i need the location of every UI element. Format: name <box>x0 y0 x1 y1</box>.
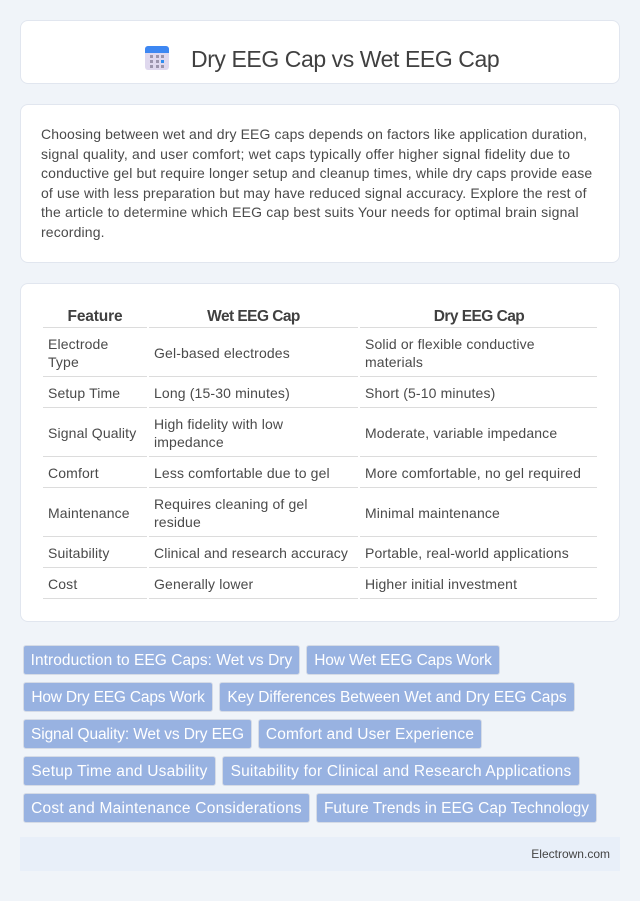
row: electrode type: materials <box>365 354 423 370</box>
row: comfort: Comfort <box>48 465 99 481</box>
table header <box>68 308 524 325</box>
table header: Feature <box>68 308 122 325</box>
row: signal quality <box>48 416 557 450</box>
row: comfort: Less comfortable due to gel <box>154 465 330 481</box>
intro paragraph: Choosing between wet and dry EEG caps depends on factors like application duration, <box>41 126 587 142</box>
row: cost <box>48 576 517 592</box>
tag <box>219 682 575 712</box>
tag: Setup Time and Usability <box>31 763 208 780</box>
row: setup time <box>48 385 495 401</box>
tag: How Wet EEG Caps Work <box>314 652 492 669</box>
row: suitability: Portable, real-world applications <box>365 545 569 561</box>
intro paragraph: signal quality, and user comfort; wet caps typically offer higher signal fidelity due to <box>41 146 570 162</box>
intro paragraph: of use with less preparation but may have reduced signal accuracy. Explore the rest of <box>41 184 587 200</box>
tag: Future Trends in EEG Cap Technology <box>324 800 589 817</box>
row: cost: Generally lower <box>154 576 253 592</box>
row: suitability: Clinical and research accuracy <box>154 545 348 561</box>
row: electrode type: Gel-based electrodes <box>154 345 290 361</box>
row: setup time: Short (5-10 minutes) <box>365 385 495 401</box>
intro paragraph: recording. <box>41 224 105 240</box>
intro text panel <box>20 104 620 263</box>
row: electrode type <box>48 336 535 370</box>
row: electrode type: Solid or flexible conductive <box>365 336 535 352</box>
tag: Introduction to EEG Caps: Wet vs Dry <box>31 652 292 669</box>
row: comfort <box>48 465 581 481</box>
row: signal quality: High fidelity with low <box>154 416 283 432</box>
tag <box>23 719 252 749</box>
tag: Suitability for Clinical and Research Applications <box>231 763 571 780</box>
icon: calendar grid <box>145 46 169 70</box>
tag <box>23 682 213 712</box>
row: maintenance <box>48 496 500 530</box>
row: suitability <box>48 545 569 561</box>
row: suitability: Suitability <box>48 545 109 561</box>
tag <box>306 645 500 675</box>
row: signal quality: Moderate, variable impedance <box>365 425 557 441</box>
row: cost: Cost <box>48 576 77 592</box>
row: setup time: Long (15-30 minutes) <box>154 385 290 401</box>
row: comfort: More comfortable, no gel required <box>365 465 581 481</box>
row: electrode type: Type <box>48 354 79 370</box>
row: signal quality: impedance <box>154 434 224 450</box>
tag <box>23 756 216 786</box>
intro paragraph: the article to determine which EEG cap best suits Your needs for optimal brain signal <box>41 204 579 220</box>
title: Dry EEG Cap vs Wet EEG Cap <box>191 46 499 72</box>
row: maintenance: Maintenance <box>48 505 130 521</box>
tag <box>23 645 300 675</box>
tag <box>23 793 310 823</box>
row: signal quality: Signal Quality <box>48 425 136 441</box>
tag: How Dry EEG Caps Work <box>31 689 205 706</box>
footer <box>20 837 620 871</box>
row: electrode type: Electrode <box>48 336 108 352</box>
table header: Wet EEG Cap <box>207 308 300 325</box>
comparison table panel <box>20 283 620 622</box>
row: maintenance: Minimal maintenance <box>365 505 500 521</box>
row: cost: Higher initial investment <box>365 576 517 592</box>
tag <box>316 793 597 823</box>
tag: Key Differences Between Wet and Dry EEG Caps <box>227 689 567 706</box>
tag <box>222 756 580 786</box>
row: setup time: Setup Time <box>48 385 120 401</box>
row: maintenance: Requires cleaning of gel <box>154 496 308 512</box>
table header: Dry EEG Cap <box>434 308 524 325</box>
header card <box>20 20 620 84</box>
footer credit: Electrown.com <box>531 847 610 861</box>
topic tags <box>23 645 597 823</box>
intro paragraph <box>41 126 592 240</box>
row: maintenance: residue <box>154 514 201 530</box>
tag: Signal Quality: Wet vs Dry EEG <box>31 726 244 743</box>
tag: Cost and Maintenance Considerations <box>31 800 302 817</box>
tag: Comfort and User Experience <box>266 726 474 743</box>
tag <box>258 719 482 749</box>
intro paragraph: conductive gel but require longer setup and cleanup times, while dry caps provide ease <box>41 165 592 181</box>
